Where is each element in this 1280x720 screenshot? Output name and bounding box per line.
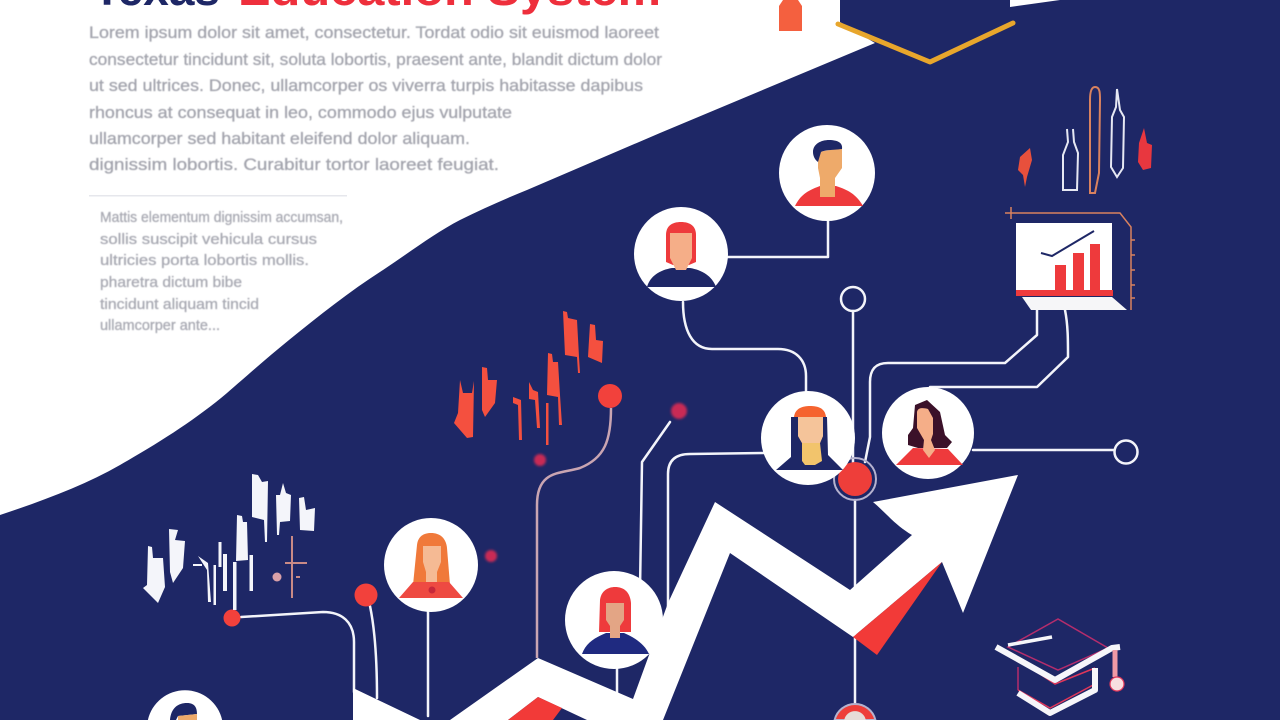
red dot: upper — [598, 384, 622, 408]
divider rule — [89, 195, 347, 196]
ring node: right — [1114, 440, 1138, 464]
secondary paragraph: pharetra dictum bibe — [100, 275, 242, 291]
bottom hub node — [835, 704, 875, 720]
secondary paragraph: tincidunt aliquam tincid — [100, 297, 259, 313]
growth arrow — [353, 475, 1018, 720]
pink dot: upper — [671, 403, 687, 419]
secondary paragraph: ullamcorper ante... — [100, 318, 220, 334]
intro paragraph: consectetur tincidunt sit, soluta lobortis, praesent ante, blandit dictum dolor — [89, 50, 662, 69]
avatar: woman with orange cap, centre — [761, 391, 855, 485]
avatar: red-haired woman, lower centre — [565, 571, 663, 669]
avatar: partial, bottom left — [148, 690, 222, 720]
intro paragraph: ut sed ultrices. Donec, ullamcorper os viverra turpis habitasse dapibus — [89, 76, 643, 95]
ring node: top — [841, 287, 865, 311]
white candlestick cluster — [143, 474, 315, 610]
avatar: dark-haired woman, right — [882, 387, 974, 479]
pink dot: small — [534, 454, 546, 466]
secondary paragraph — [100, 210, 343, 334]
connector network — [241, 220, 1114, 716]
secondary paragraph: sollis suscipit vehicula cursus — [100, 232, 317, 248]
chart board icon — [1005, 207, 1135, 310]
intro paragraph — [89, 23, 662, 174]
secondary paragraph: Mattis elementum dignissim accumsan, — [100, 210, 343, 226]
red candlestick cluster — [454, 311, 603, 445]
red hub node — [834, 458, 876, 500]
avatar: orange-haired woman, lower left — [384, 518, 478, 612]
icon: red bottle top — [779, 0, 802, 31]
icon: graduation cap — [996, 619, 1124, 713]
pink dot: mid — [485, 550, 497, 562]
gold chevron — [838, 23, 1013, 62]
red dot: lower — [354, 584, 378, 606]
intro paragraph: dignissim lobortis. Curabitur tortor laoreet feugiat. — [89, 155, 499, 174]
icon: bottles — [1018, 87, 1152, 193]
avatar: man, top — [779, 125, 875, 221]
secondary paragraph: ultricies porta lobortis mollis. — [100, 253, 309, 269]
pink cross mark — [272, 536, 307, 598]
avatar: red-haired woman, left — [634, 207, 728, 301]
red dot: left — [224, 610, 240, 626]
intro paragraph: Lorem ipsum dolor sit amet, consectetur. Tordat odio sit euismod laoreet — [89, 23, 659, 42]
intro paragraph: ullamcorper sed habitant eleifend dolor aliquam. — [89, 129, 470, 148]
intro paragraph: rhoncus at consequat in leo, commodo ejus vulputate — [89, 103, 512, 122]
